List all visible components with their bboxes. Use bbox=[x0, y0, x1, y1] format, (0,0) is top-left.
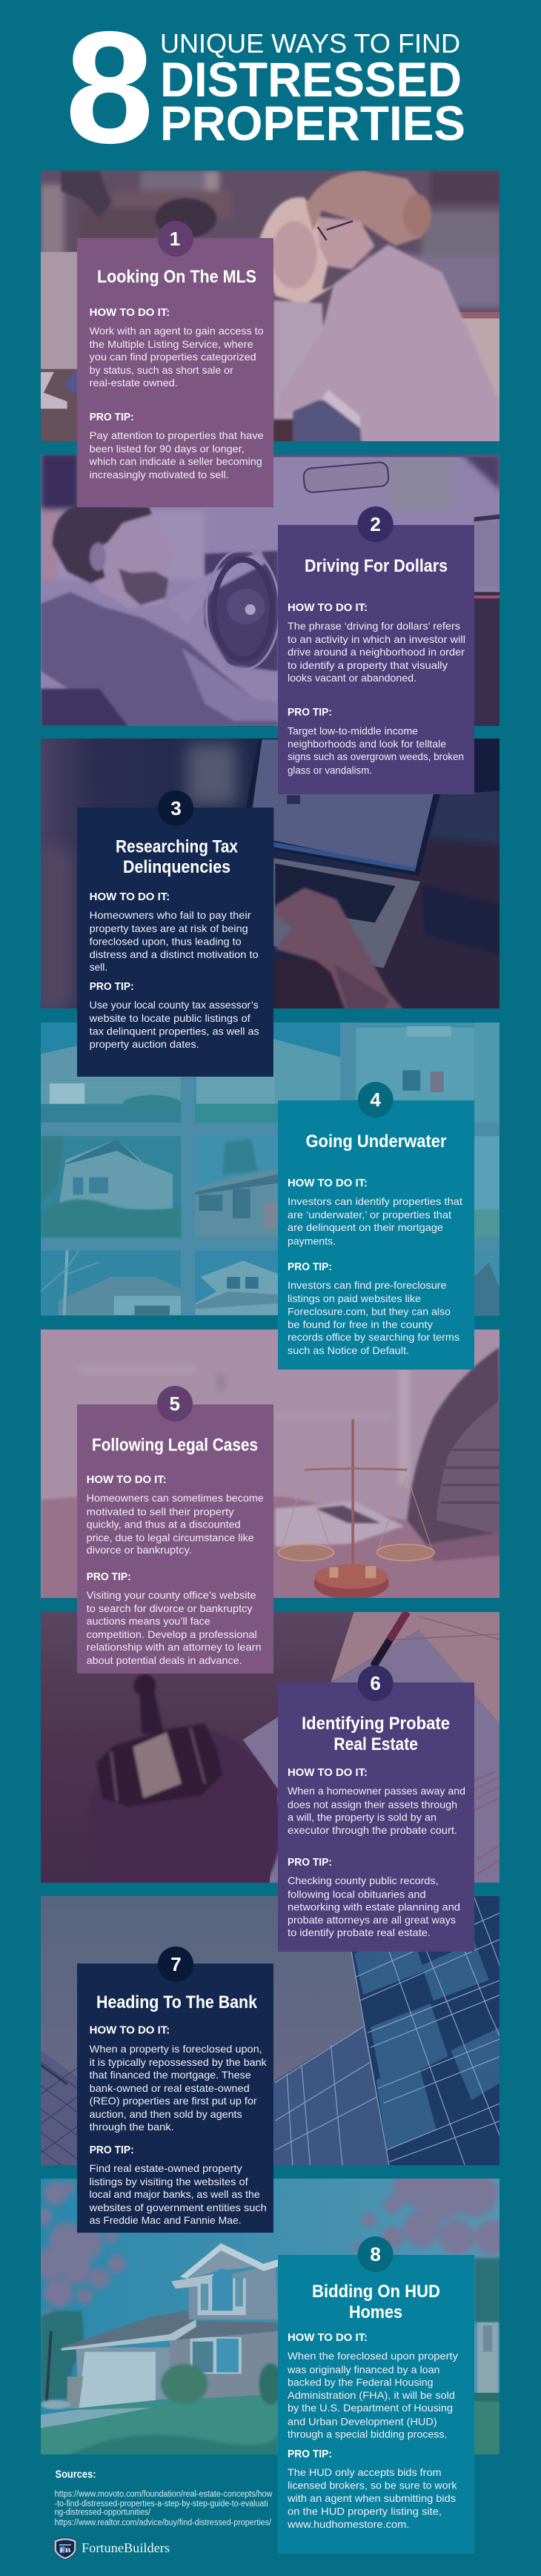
heading: Following Legal Cases bbox=[92, 1436, 258, 1455]
how to do it: auction, and then sold by agents bbox=[90, 2108, 242, 2120]
number badge 6 bbox=[358, 1665, 394, 1701]
pro tip: Find real estate-owned property bbox=[90, 2162, 242, 2174]
number badge 3: 3 bbox=[170, 797, 182, 819]
how to do it: HOW TO DO IT: bbox=[288, 1767, 368, 1779]
how to do it: bank-owned or real estate-owned bbox=[90, 2082, 250, 2094]
pro tip bbox=[87, 1571, 262, 1666]
how to do it: HOW TO DO IT: bbox=[288, 1178, 368, 1189]
pro tip: Checking county public records, bbox=[288, 1875, 439, 1886]
how to do it: does not assign their assets through bbox=[288, 1799, 457, 1811]
heading bbox=[312, 2282, 440, 2322]
pro tip: networking with estate planning and bbox=[288, 1901, 460, 1913]
photo 6: judge gavel on documents bbox=[41, 1612, 499, 1883]
how to do it bbox=[90, 891, 259, 973]
pro tip: about potential deals in advance. bbox=[87, 1654, 242, 1666]
pro tip: such as Notice of Default. bbox=[288, 1344, 409, 1356]
photo 5: scales of justice bbox=[41, 1327, 501, 1602]
how to do it bbox=[288, 602, 465, 684]
sources heading: Sources: bbox=[55, 2469, 96, 2481]
pro tip: records office by searching for terms bbox=[288, 1331, 459, 1343]
pro tip: been listed for 90 days or longer, bbox=[90, 443, 245, 455]
pro tip: PRO TIP: bbox=[87, 1571, 131, 1583]
how to do it: you can find properties categorized bbox=[90, 351, 256, 363]
icon: shield bbox=[54, 2537, 76, 2560]
how to do it bbox=[87, 1474, 264, 1556]
pro tip: Investors can find pre-foreclosure bbox=[288, 1279, 447, 1291]
how to do it: The phrase ‘driving for dollars’ refers bbox=[288, 620, 460, 632]
number badge 6: 6 bbox=[370, 1672, 381, 1694]
how to do it: the Multiple Listing Service, where bbox=[90, 338, 253, 350]
how to do it: are ‘underwater,’ or properties that bbox=[288, 1209, 451, 1221]
photo 7: glass office buildings bbox=[41, 1894, 501, 2169]
pro tip: listings on paid websites like bbox=[288, 1292, 421, 1304]
pro tip: as Freddie Mac and Fannie Mae. bbox=[90, 2214, 242, 2226]
source links bbox=[55, 2490, 273, 2527]
photo 3: hand on a laptop bbox=[41, 736, 501, 1012]
how to do it bbox=[287, 2332, 458, 2440]
pro tip bbox=[288, 1857, 460, 1938]
how to do it: backed by the Federal Housing bbox=[288, 2376, 433, 2388]
heading: Bidding On HUD bbox=[312, 2282, 440, 2302]
how to do it: executor through the probate court. bbox=[288, 1824, 457, 1836]
how to do it: When a property is foreclosed upon, bbox=[90, 2043, 262, 2055]
how to do it: are delinquent on their mortgage bbox=[288, 1221, 443, 1233]
pro tip: listings by visiting the websites of bbox=[90, 2176, 248, 2187]
pro tip: glass or vandalism. bbox=[288, 764, 372, 776]
heading: Homes bbox=[349, 2302, 402, 2322]
pro tip: PRO TIP: bbox=[90, 981, 134, 993]
how to do it: it is typically repossessed by the bank bbox=[90, 2056, 268, 2068]
how to do it: Investors can identify properties that bbox=[288, 1195, 462, 1207]
how to do it: was originally financed by a loan bbox=[287, 2364, 440, 2376]
card 2: driving for dollars bbox=[278, 506, 474, 794]
source links: https://www.realtor.com/advice/buy/find-distressed-properties/ bbox=[55, 2518, 272, 2527]
pro tip: property auction dates. bbox=[90, 1038, 199, 1050]
title bbox=[65, 0, 465, 176]
number badge 1: 1 bbox=[170, 228, 180, 250]
how to do it: HOW TO DO IT: bbox=[90, 307, 170, 319]
how to do it: property taxes are at risk of being bbox=[90, 922, 248, 934]
big numeral 8: 8 bbox=[65, 0, 154, 176]
photo 4: grid of houses bbox=[41, 1019, 501, 1318]
heading: Researching Tax bbox=[116, 836, 238, 857]
pro tip: PRO TIP: bbox=[288, 1261, 332, 1273]
pro tip bbox=[288, 1261, 459, 1356]
pro tip: Pay attention to properties that have bbox=[90, 429, 264, 441]
pro tip: which can indicate a seller becoming bbox=[89, 455, 262, 467]
logo wordmark: FortuneBuilders bbox=[82, 2540, 170, 2555]
pro tip bbox=[89, 412, 264, 480]
heading bbox=[302, 1714, 450, 1754]
number badge 4: 4 bbox=[370, 1089, 381, 1111]
how to do it: Homeowners can sometimes become bbox=[87, 1492, 264, 1504]
pro tip: The HUD only accepts bids from bbox=[288, 2466, 442, 2478]
pro tip: PRO TIP: bbox=[288, 1857, 332, 1869]
number badge 3 bbox=[158, 790, 193, 826]
number badge 7 bbox=[158, 1946, 193, 1982]
pro tip: to identify probate real estate. bbox=[288, 1926, 431, 1938]
house body bbox=[62, 2243, 278, 2408]
number badge 5: 5 bbox=[169, 1393, 180, 1415]
pro tip: be found for free in the county bbox=[288, 1318, 433, 1330]
number badge 8 bbox=[358, 2236, 394, 2272]
pro tip bbox=[287, 2448, 458, 2530]
pro tip: PRO TIP: bbox=[288, 2448, 332, 2460]
pro tip: websites of government entities such bbox=[89, 2202, 267, 2213]
number badge 5 bbox=[157, 1386, 193, 1421]
how to do it: through a special bidding process. bbox=[288, 2428, 447, 2440]
pro tip: neighborhoods and look for telltale bbox=[288, 738, 446, 750]
how to do it: foreclosed upon, thus leading to bbox=[90, 936, 242, 948]
source links: -to-find-distressed-properties-a-step-by-step-guide-to-evaluati bbox=[55, 2500, 268, 2509]
number badge 4 bbox=[358, 1082, 394, 1117]
pro tip: probate attorneys are all great ways bbox=[288, 1914, 456, 1926]
card 4: going underwater bbox=[278, 1082, 474, 1370]
how to do it: When the foreclosed upon property bbox=[288, 2350, 458, 2362]
pro tip: tax delinquent properties, as well as bbox=[90, 1025, 259, 1037]
how to do it: sell. bbox=[90, 961, 107, 973]
card 5: following legal cases bbox=[77, 1386, 273, 1674]
title line: distressed: DISTRESSED bbox=[160, 52, 462, 107]
card 7: heading to the bank bbox=[77, 1946, 273, 2233]
how to do it: looks vacant or abandoned. bbox=[288, 672, 416, 684]
heading: Heading To The Bank bbox=[96, 1992, 257, 2012]
photo 2: man driving a car bbox=[41, 452, 503, 730]
pro tip bbox=[89, 981, 259, 1050]
pro tip: licensed brokers, so be sure to work bbox=[288, 2480, 458, 2491]
number badge 8: 8 bbox=[370, 2243, 381, 2265]
pro tip: Use your local county tax assessor’s bbox=[90, 999, 259, 1011]
how to do it: Administration (FHA), it will be sold bbox=[288, 2389, 455, 2401]
card 3: researching tax delinquencies bbox=[77, 790, 273, 1077]
how to do it: that financed the mortgage. These bbox=[90, 2069, 251, 2081]
pro tip: PRO TIP: bbox=[90, 412, 134, 423]
number badge 7: 7 bbox=[170, 1953, 182, 1975]
how to do it: a will, the property is sold by an bbox=[288, 1811, 437, 1823]
card 6: identifying probate real estate bbox=[278, 1665, 474, 1952]
pro tip: following local obituaries and bbox=[288, 1888, 426, 1900]
photo 1: agent and clients at a table bbox=[41, 167, 501, 446]
pro tip: on the HUD property listing site, bbox=[288, 2506, 442, 2517]
how to do it: real-estate owned. bbox=[90, 377, 178, 389]
FortuneBuilders logo bbox=[54, 2537, 170, 2560]
how to do it: to identify a property that visually bbox=[288, 659, 448, 671]
pro tip: website to locate public listings of bbox=[89, 1012, 250, 1024]
pro tip: Foreclosure.com, but they can also bbox=[288, 1305, 451, 1317]
row 3 tiles bbox=[41, 1250, 501, 1315]
title line: unique ways to find: UNIQUE WAYS TO FIND bbox=[160, 28, 460, 59]
how to do it: through the bank. bbox=[90, 2121, 174, 2133]
number badge 2 bbox=[358, 506, 394, 542]
how to do it: distress and a distinct motivation to bbox=[90, 948, 259, 960]
title line: properties: PROPERTIES bbox=[160, 96, 465, 151]
how to do it: and Urban Development (HUD) bbox=[288, 2415, 437, 2427]
card 8: bidding on HUD homes bbox=[278, 2236, 474, 2554]
how to do it: HOW TO DO IT: bbox=[90, 2025, 170, 2037]
pro tip: www.hudhomestore.com. bbox=[287, 2518, 409, 2530]
how to do it: (REO) properties are first put up for bbox=[90, 2095, 257, 2107]
how to do it bbox=[90, 2025, 268, 2133]
how to do it: price, due to legal circumstance like bbox=[87, 1531, 254, 1543]
how to do it: When a homeowner passes away and bbox=[288, 1785, 465, 1797]
how to do it: to an activity in which an investor will bbox=[288, 633, 465, 645]
how to do it: Work with an agent to gain access to bbox=[90, 325, 264, 337]
how to do it: by status, such as short sale or bbox=[90, 364, 233, 376]
pro tip: signs such as overgrown weeds, broken bbox=[288, 750, 464, 762]
row 1 tiles bbox=[41, 1023, 500, 1123]
pro tip: with an agent when submitting bids bbox=[287, 2492, 456, 2504]
pro tip: relationship with an attorney to learn bbox=[87, 1641, 262, 1653]
how to do it: HOW TO DO IT: bbox=[288, 602, 368, 614]
how to do it: divorce or bankruptcy. bbox=[87, 1544, 192, 1556]
heading: Identifying Probate bbox=[302, 1714, 450, 1734]
source links: https://www.movoto.com/foundation/real-estate-concepts/how bbox=[55, 2490, 273, 2499]
heading: Delinquencies bbox=[123, 857, 230, 877]
how to do it: drive around a neighborhood in order bbox=[288, 646, 465, 658]
card 1: looking on the MLS bbox=[77, 221, 273, 507]
heading: Real Estate bbox=[333, 1734, 418, 1754]
sources bbox=[55, 2469, 273, 2527]
pro tip: competition. Develop a professional bbox=[87, 1628, 257, 1640]
how to do it: quickly, and thus at a discounted bbox=[87, 1519, 241, 1530]
pro tip bbox=[288, 707, 464, 776]
number badge 1 bbox=[158, 221, 193, 257]
how to do it: payments. bbox=[288, 1235, 336, 1247]
heading: Looking On The MLS bbox=[97, 267, 256, 287]
pro tip: Visiting your county office’s website bbox=[87, 1589, 256, 1601]
source links: ng-distressed-opportunities/ bbox=[55, 2508, 151, 2517]
pro tip: auctions means you’ll face bbox=[87, 1615, 210, 1627]
heading: Going Underwater bbox=[305, 1132, 447, 1152]
pro tip: local and major banks, as well as the bbox=[90, 2188, 260, 2200]
pro tip: to search for divorce or bankruptcy bbox=[87, 1602, 253, 1614]
heading: Driving For Dollars bbox=[305, 556, 448, 576]
how to do it bbox=[288, 1178, 462, 1247]
row 2 tiles bbox=[41, 1136, 500, 1238]
how to do it: by the U.S. Department of Housing bbox=[288, 2402, 453, 2414]
pro tip: increasingly motivated to sell. bbox=[90, 469, 229, 480]
pro tip bbox=[89, 2144, 267, 2226]
how to do it: Homeowners who fail to pay their bbox=[90, 909, 251, 921]
pro tip: PRO TIP: bbox=[90, 2144, 134, 2156]
how to do it: HOW TO DO IT: bbox=[87, 1474, 167, 1486]
how to do it bbox=[288, 1767, 465, 1836]
pro tip: Target low-to-middle income bbox=[288, 725, 418, 737]
how to do it: motivated to sell their property bbox=[87, 1505, 234, 1517]
how to do it: HOW TO DO IT: bbox=[288, 2332, 368, 2344]
icon: shield: FB bbox=[59, 2547, 71, 2554]
heading bbox=[116, 836, 238, 877]
how to do it: HOW TO DO IT: bbox=[90, 891, 170, 903]
pro tip: PRO TIP: bbox=[288, 707, 332, 719]
how to do it bbox=[90, 307, 264, 389]
photo 8: suburban house with blossoms bbox=[33, 2170, 510, 2457]
number badge 2: 2 bbox=[370, 513, 381, 535]
